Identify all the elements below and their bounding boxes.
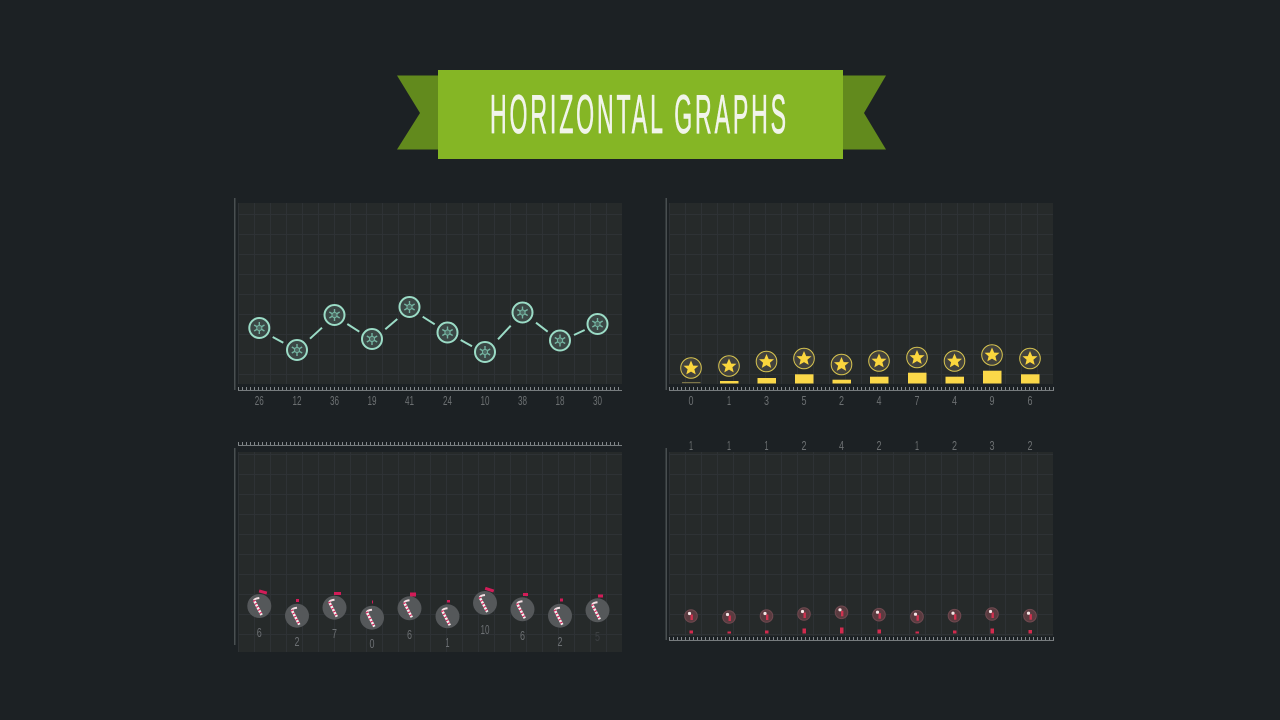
top values: 2 [876,438,882,453]
ornament values: 5 [595,629,600,644]
top values [689,438,1032,453]
axis values: 4 [876,393,882,408]
ornament caps [259,587,603,604]
axis values: 6 [1028,393,1032,408]
axis values [688,393,1032,408]
axis values: 18 [556,393,564,408]
axis values: 0 [688,393,694,408]
ornament values: 6 [520,628,525,643]
axis values [255,393,602,408]
title ribbon banner [397,70,886,159]
snowflake markers [249,297,608,362]
top values: 2 [1028,438,1032,453]
axis values: 10 [480,393,490,408]
axis values: 7 [914,393,920,408]
small red bars [690,628,1032,634]
title: HORIZONTAL GRAPHS [490,83,786,145]
top values: 1 [689,438,693,453]
star markers [681,345,1040,378]
ornament values: 2 [558,634,562,649]
top values: 1 [727,438,731,453]
axis values: 4 [952,393,957,408]
ornament values: 1 [446,635,450,650]
top values: 1 [915,438,919,453]
panel: red orb graph [666,438,1054,641]
top values: 2 [802,438,806,453]
red orbs [685,606,1036,623]
axis values: 2 [839,393,844,408]
ornament values: 6 [407,627,412,642]
ornament values: 6 [257,625,262,640]
axis values: 41 [405,393,414,408]
top values: 3 [990,438,994,453]
ornament values [257,622,600,651]
axis values: 24 [443,393,452,408]
axis values: 5 [802,393,806,408]
candy cane ornaments [247,591,610,630]
axis values: 36 [330,393,339,408]
axis values: 12 [292,393,302,408]
axis values: 38 [518,393,527,408]
ornament values: 0 [370,636,374,651]
panel: snowflake line graph [234,198,622,408]
line connectors [273,317,585,346]
panel: star bar graph [666,198,1054,408]
top values: 2 [952,438,957,453]
yellow bars [682,371,1040,384]
axis values: 9 [990,393,994,408]
top values: 1 [764,438,768,453]
axis values: 26 [255,393,264,408]
ornament values: 10 [480,622,490,637]
top values: 4 [839,438,844,453]
axis values: 1 [727,393,731,408]
axis values: 30 [593,393,602,408]
axis values: 19 [368,393,376,408]
ornament values: 2 [294,634,300,649]
ornament values: 7 [332,626,337,641]
axis values: 3 [764,393,769,408]
panel: candy cane ornament graph [234,442,622,652]
